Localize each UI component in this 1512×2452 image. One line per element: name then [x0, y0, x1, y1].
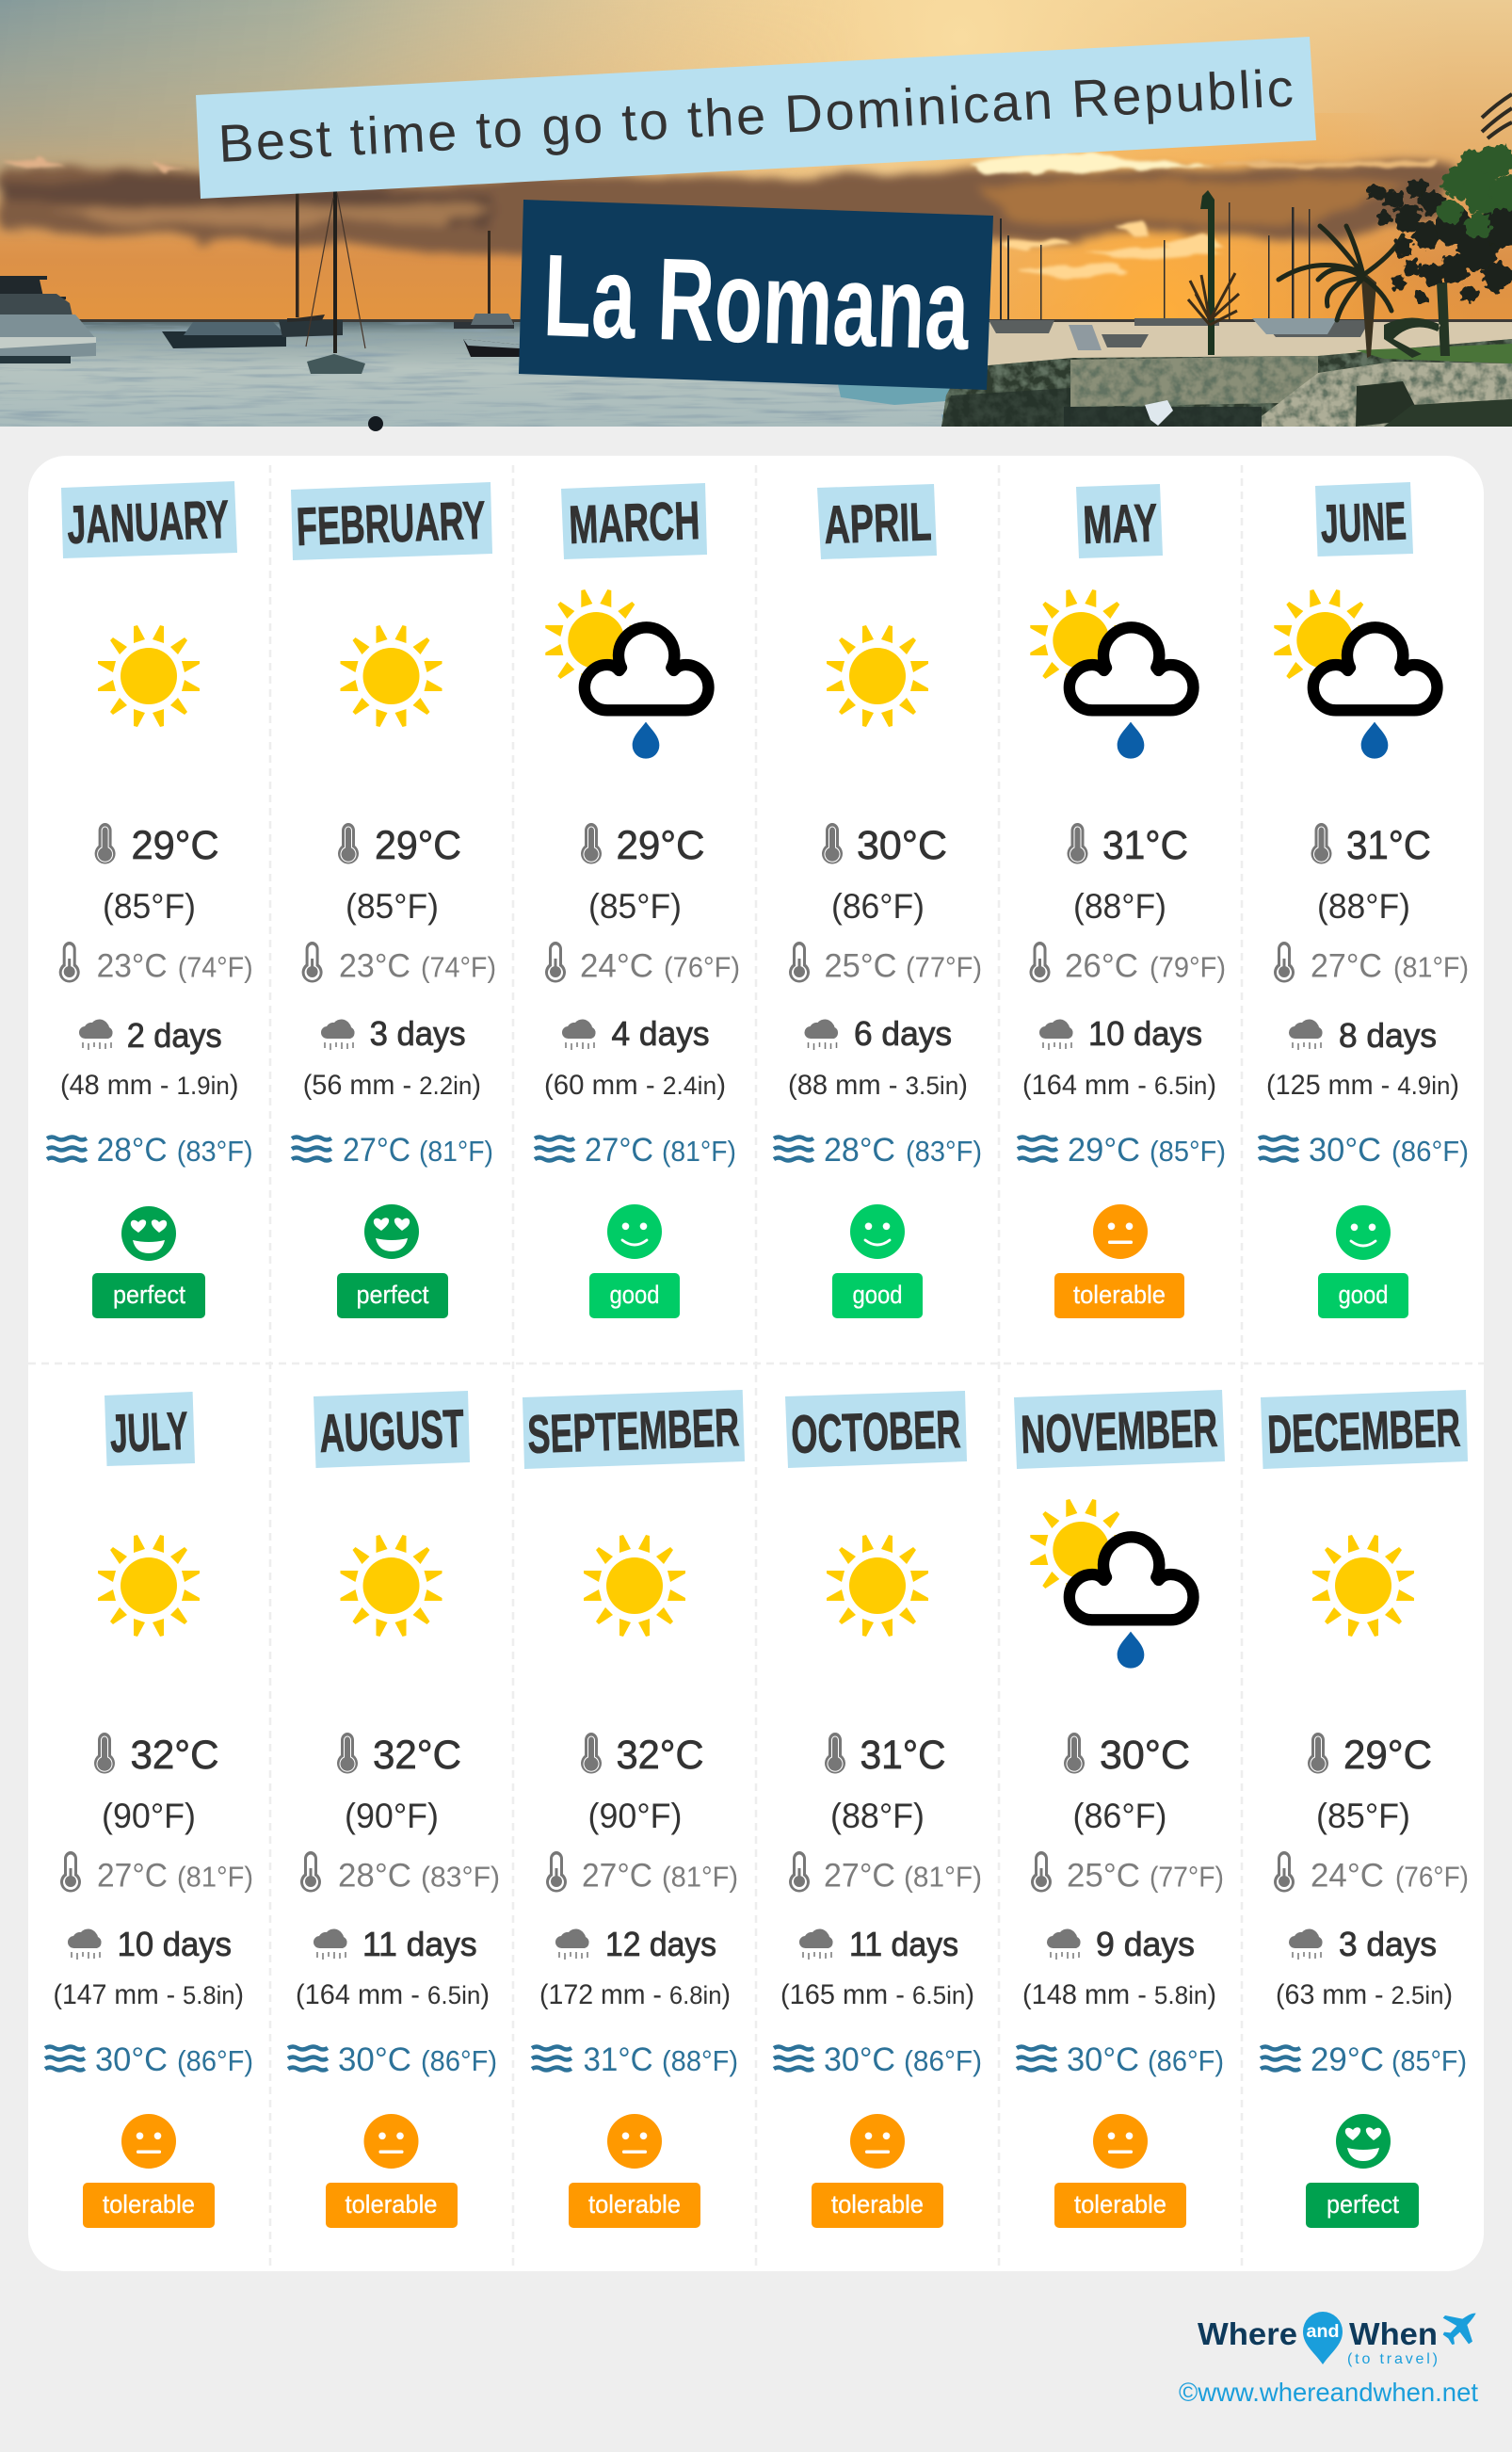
sea temperature: (88°F) [662, 2044, 738, 2077]
precipitation amount: (164 mm - 6.5in) [296, 1979, 490, 2010]
sea temperature [1261, 2041, 1467, 2078]
sea temperature [535, 1132, 736, 1169]
main white card [28, 456, 1484, 2271]
month label: August: AUGUST [318, 1398, 465, 1464]
rainy days [1289, 1016, 1437, 1055]
sea temperature [288, 2041, 497, 2078]
low temperature: (79°F) [1150, 951, 1226, 983]
precipitation amount: (60 mm - 2.4in) [544, 1070, 726, 1101]
left motor yacht [0, 276, 96, 363]
month label: January [61, 481, 237, 558]
sea temperature: 27°C [585, 1132, 653, 1169]
low temperature [1274, 942, 1469, 985]
precipitation amount: (148 mm - 5.8in) [1022, 1979, 1216, 2010]
month: December [1261, 1390, 1469, 2228]
rating: good: good [853, 1281, 902, 1309]
high temperature fahrenheit: (88°F) [1073, 887, 1166, 926]
high temperature celsius [1311, 823, 1431, 868]
month label: September [523, 1390, 745, 1469]
rainy days [562, 1014, 710, 1053]
month: May [1018, 484, 1226, 1318]
low temperature: 24°C [1311, 1857, 1384, 1895]
month label: May [1076, 484, 1163, 558]
high temperature celsius: 30°C [1100, 1733, 1190, 1778]
month: November [1014, 1390, 1225, 2228]
city name box [519, 200, 993, 390]
high temperature fahrenheit: (85°F) [346, 887, 439, 926]
sea temperature: (83°F) [177, 1135, 253, 1168]
high temperature fahrenheit: (90°F) [102, 1797, 196, 1835]
high temperature celsius [825, 1733, 945, 1778]
rainy days: 4 days [612, 1014, 710, 1053]
rainy days [1039, 1014, 1202, 1053]
month label: October: OCTOBER [790, 1399, 961, 1465]
low temperature [546, 1851, 738, 1895]
month: June [1259, 482, 1469, 1318]
moored boats [162, 191, 1337, 431]
precipitation amount: (48 mm - 1.9in) [60, 1070, 239, 1101]
sea temperature: (86°F) [421, 2044, 497, 2077]
rainy days [1289, 1925, 1437, 1963]
month label: March [561, 483, 707, 559]
sea temperature: 30°C [1067, 2041, 1139, 2078]
icon: sun behind rain cloud [545, 589, 708, 759]
rainy days: 10 days [118, 1925, 232, 1963]
rating: perfect [337, 1204, 448, 1318]
icon: sun [827, 625, 928, 727]
sea temperature [47, 1132, 253, 1169]
high temperature celsius: 32°C [130, 1733, 218, 1778]
high temperature celsius: 31°C [1346, 823, 1431, 868]
low temperature: (74°F) [421, 951, 496, 983]
high temperature celsius: 31°C [1102, 823, 1188, 868]
high temperature celsius [94, 1733, 218, 1778]
low temperature: 24°C [580, 947, 653, 985]
rating: tolerable [326, 2114, 458, 2228]
month: January [47, 481, 253, 1318]
logo: Where and When to travel: and [1307, 2322, 1339, 2342]
high temperature celsius: 32°C [616, 1733, 704, 1778]
high temperature fahrenheit: (88°F) [1317, 887, 1410, 926]
high temperature celsius: 32°C [373, 1733, 461, 1778]
copyright website: ©www.whereandwhen.net [1179, 2378, 1478, 2407]
sea temperature: (85°F) [1150, 1135, 1226, 1168]
high temperature fahrenheit: (86°F) [831, 887, 925, 926]
precipitation amount: (125 mm - 4.9in) [1266, 1070, 1459, 1101]
low temperature: 27°C [97, 1857, 168, 1895]
lamp post and palms [1188, 94, 1512, 358]
low temperature: 28°C [338, 1857, 411, 1895]
month: March [535, 483, 740, 1318]
low temperature: 23°C [97, 947, 168, 985]
high temperature fahrenheit: (85°F) [588, 887, 682, 926]
sea temperature [292, 1132, 493, 1169]
rating: good [589, 1204, 680, 1318]
month label: August [314, 1391, 470, 1468]
title banner [196, 37, 1316, 199]
sea temperature: (83°F) [906, 1135, 982, 1168]
sea temperature: 30°C [338, 2041, 411, 2078]
low temperature: (81°F) [662, 1861, 738, 1893]
month label: November [1014, 1390, 1225, 1469]
high temperature celsius [1068, 823, 1188, 868]
rainy days: 3 days [370, 1014, 466, 1053]
precipitation amount: (63 mm - 2.5in) [1276, 1979, 1453, 2010]
low temperature [1031, 1851, 1224, 1895]
precipitation amount: (165 mm - 6.5in) [780, 1979, 974, 2010]
month: October [774, 1391, 982, 2228]
low temperature: (81°F) [904, 1861, 982, 1893]
low temperature: (77°F) [906, 951, 982, 983]
month label: January: JANUARY [66, 490, 230, 556]
low temperature [60, 1851, 253, 1895]
month: August [288, 1391, 500, 2228]
low temperature: (81°F) [177, 1861, 253, 1893]
rainy days [1047, 1925, 1195, 1963]
rating: tolerable: tolerable [588, 2190, 681, 2218]
rainy days [555, 1925, 716, 1963]
high temperature celsius [338, 823, 461, 868]
icon: sun [1312, 1535, 1414, 1637]
high temperature fahrenheit: (85°F) [103, 887, 196, 926]
precipitation amount: (164 mm - 6.5in) [1022, 1070, 1216, 1101]
sea temperature: (86°F) [1148, 2044, 1224, 2077]
high temperature fahrenheit: (85°F) [1316, 1797, 1410, 1835]
sea temperature [45, 2041, 253, 2078]
logo: Where and When to travel [1198, 2312, 1476, 2367]
month: February [291, 482, 496, 1318]
low temperature [59, 942, 253, 985]
month label: September: SEPTEMBER [526, 1397, 740, 1465]
low temperature: 27°C [1311, 947, 1382, 985]
low temperature: 25°C [1067, 1857, 1140, 1895]
sea temperature: (86°F) [1391, 1135, 1469, 1168]
month label: June: JUNE [1319, 491, 1407, 555]
icon: sun [341, 1535, 442, 1637]
sea temperature: 28°C [824, 1132, 895, 1169]
rating: tolerable: tolerable [1074, 2190, 1166, 2218]
trees [1368, 143, 1512, 358]
title banner: Best time to go to the Dominican Republic [217, 57, 1295, 173]
sea temperature: (86°F) [904, 2044, 982, 2077]
rainy days [799, 1925, 958, 1963]
rating: tolerable: tolerable [1073, 1281, 1166, 1309]
month label: November: NOVEMBER [1020, 1398, 1218, 1465]
sea temperature: 30°C [1309, 1132, 1381, 1169]
rating: tolerable [1054, 1204, 1184, 1318]
low temperature: 25°C [825, 947, 896, 985]
month label: May: MAY [1082, 492, 1158, 556]
month label: June [1315, 482, 1413, 557]
header photo: sunset over La Romana harbour [0, 0, 1512, 431]
low temperature [545, 942, 740, 985]
precipitation amount: (56 mm - 2.2in) [303, 1070, 481, 1101]
rating: perfect: perfect [1327, 2190, 1399, 2218]
logo: Where and When to travel: (to travel) [1347, 2351, 1438, 2367]
high temperature fahrenheit: (86°F) [1073, 1797, 1167, 1835]
high temperature celsius: 29°C [616, 823, 704, 868]
high temperature celsius: 30°C [857, 823, 947, 868]
high temperature fahrenheit: (90°F) [345, 1797, 439, 1835]
low temperature: (81°F) [1393, 951, 1469, 983]
sea temperature: (85°F) [1391, 2044, 1467, 2077]
low temperature: 27°C [582, 1857, 652, 1895]
icon: sun [584, 1535, 685, 1637]
low temperature [300, 1851, 500, 1895]
month label: April [817, 484, 937, 559]
month: September [523, 1390, 745, 2228]
icon: sun behind rain cloud [1030, 589, 1193, 759]
icon: sun [341, 625, 442, 727]
sea temperature: 31°C [584, 2041, 653, 2078]
rainy days: 11 days [849, 1925, 958, 1963]
high temperature celsius [95, 823, 218, 868]
low temperature: (77°F) [1150, 1861, 1224, 1893]
low temperature: 27°C [824, 1857, 895, 1895]
rainy days: 6 days [854, 1014, 952, 1053]
rainy days: 3 days [1339, 1925, 1437, 1963]
rating: tolerable [83, 2114, 215, 2228]
rating: perfect: perfect [356, 1281, 429, 1309]
sea temperature [1017, 2041, 1224, 2078]
low temperature [789, 1851, 982, 1895]
month label: March: MARCH [568, 491, 700, 556]
city name box: La Romana [541, 231, 972, 375]
sea temperature: 30°C [95, 2041, 168, 2078]
rating: tolerable [1054, 2114, 1186, 2228]
sea temperature [774, 2041, 982, 2078]
low temperature: (74°F) [178, 951, 253, 983]
rainy days: 11 days [362, 1925, 477, 1963]
precipitation amount: (147 mm - 5.8in) [53, 1979, 244, 2010]
logo: Where and When to travel: When [1349, 2316, 1438, 2351]
rating: perfect: perfect [113, 1281, 185, 1309]
high temperature celsius: 29°C [375, 823, 461, 868]
rainy days [68, 1925, 232, 1963]
low temperature: 23°C [339, 947, 410, 985]
low temperature [1274, 1851, 1469, 1895]
high temperature celsius: 29°C [132, 823, 218, 868]
rating: good: good [610, 1281, 659, 1309]
rainy days [321, 1014, 466, 1053]
month label: October [785, 1391, 967, 1468]
rainy days [314, 1925, 477, 1963]
sea temperature [1259, 1132, 1469, 1169]
rating: good: good [1339, 1281, 1388, 1309]
low temperature [1030, 942, 1226, 985]
sea temperature [1018, 1132, 1226, 1169]
month: April [774, 484, 982, 1318]
rainy days [79, 1016, 222, 1055]
month label: July [105, 1392, 195, 1466]
rating: tolerable: tolerable [831, 2190, 924, 2218]
rating: good [832, 1204, 923, 1318]
shoreline, wall and rocks [941, 339, 1512, 427]
precipitation amount: (88 mm - 3.5in) [788, 1070, 968, 1101]
high temperature fahrenheit: (90°F) [587, 1797, 682, 1835]
rating: tolerable [812, 2114, 943, 2228]
rating: perfect [92, 1206, 205, 1318]
rating: tolerable: tolerable [345, 2190, 437, 2218]
rainy days [804, 1014, 952, 1053]
icon: sun behind rain cloud [1274, 589, 1437, 759]
high temperature celsius: 31°C [861, 1733, 945, 1778]
rainy days: 9 days [1096, 1925, 1195, 1963]
month label: February: FEBRUARY [296, 491, 487, 557]
low temperature [789, 942, 982, 985]
month label: July: JULY [109, 1401, 189, 1464]
icon: sun [827, 1535, 928, 1637]
sea temperature: 28°C [97, 1132, 168, 1169]
rainy days: 8 days [1339, 1016, 1437, 1055]
month: July [45, 1392, 253, 2228]
high temperature celsius: 29°C [1343, 1733, 1432, 1778]
rating: tolerable [569, 2114, 700, 2228]
low temperature: 26°C [1065, 947, 1138, 985]
rating: tolerable: tolerable [103, 2190, 195, 2218]
month label: April: APRIL [823, 492, 932, 556]
logo: Where and When to travel: Where [1198, 2316, 1297, 2351]
low temperature: (83°F) [421, 1861, 500, 1893]
rainy days: 2 days [127, 1016, 222, 1055]
rainy days: 12 days [605, 1925, 716, 1963]
rating: perfect [1306, 2114, 1419, 2228]
rating: good [1318, 1205, 1408, 1318]
sea temperature: 27°C [343, 1132, 410, 1169]
sea temperature: 30°C [824, 2041, 895, 2078]
sea temperature: (81°F) [419, 1135, 493, 1168]
low temperature [302, 942, 496, 985]
icon: sun [98, 1535, 200, 1637]
precipitation amount: (172 mm - 6.8in) [539, 1979, 731, 2010]
sea temperature: 29°C [1311, 2041, 1384, 2078]
icon: sun [98, 625, 200, 727]
low temperature: (76°F) [1395, 1861, 1469, 1893]
icon: sun behind rain cloud [1030, 1499, 1193, 1669]
sea temperature: (86°F) [177, 2044, 253, 2077]
sea temperature [532, 2041, 738, 2078]
high temperature celsius [581, 1733, 704, 1778]
rainy days: 10 days [1088, 1014, 1202, 1053]
low temperature: (76°F) [664, 951, 740, 983]
sea temperature: (81°F) [662, 1135, 736, 1168]
high temperature fahrenheit: (88°F) [830, 1797, 925, 1835]
sea temperature: 29°C [1068, 1132, 1140, 1169]
sea temperature [774, 1132, 982, 1169]
month label: February [291, 482, 492, 560]
